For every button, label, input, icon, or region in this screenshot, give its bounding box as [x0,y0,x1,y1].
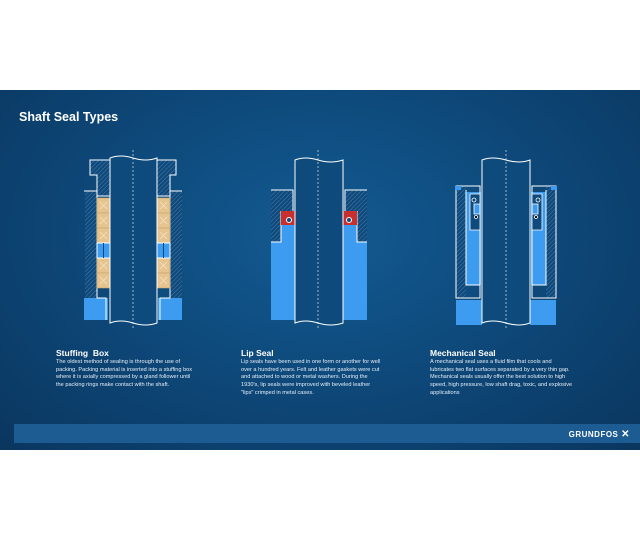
text: lip seal [241,348,380,396]
footer bar with logo: GRUNDFOS ✕ [569,429,630,440]
text: lip seal: Lip seals have been used in one form or another for well [241,359,380,365]
text: stuffing box: where it is axially compressed by a gland follower until [56,374,190,380]
text: mechanical seal [430,348,572,396]
diagram: lip seal [271,150,367,330]
footer bar with logo [14,424,640,443]
text: lip seal: "lips" crimped in metal cases. [241,390,314,396]
text: mechanical seal: A mechanical seal uses a fluid film that cools and [430,359,552,365]
text: stuffing box: the packing rings make contact with the shaft. [56,382,169,388]
text: mechanical seal: lubricates two flat surfaces separated by a very thin gap. [430,367,570,373]
text: lip seal: Lip Seal [241,348,274,358]
text: stuffing box [56,348,192,388]
text: mechanical seal: Mechanical Seal [430,348,496,358]
text: mechanical seal: Mechanical seals usually offer the best solution to high [430,374,565,380]
text: stuffing box: The oldest method of sealing is through the use of [56,359,180,365]
diagram: stuffing box [84,150,182,330]
text: mechanical seal: applications [430,390,460,396]
diagrams [84,150,557,328]
title: Shaft Seal Types [19,110,118,124]
text: lip seal: over a hundred years. Felt and leather gaskets were cut [241,367,379,373]
text: lip seal: 1930's, lip seals were improved with beveled leather [241,382,370,388]
text: stuffing box: packing. Packing material is inserted into a stuffing box [56,367,192,373]
text: stuffing box: Stuffing Box [56,348,109,358]
slide background [0,90,640,450]
text: mechanical seal: speed, high pressure, low shaft drag, toxic, and explosive [430,382,572,388]
text: lip seal: and attached to wood or metal washers. During the [241,374,368,380]
diagram: mechanical seal [455,150,557,330]
